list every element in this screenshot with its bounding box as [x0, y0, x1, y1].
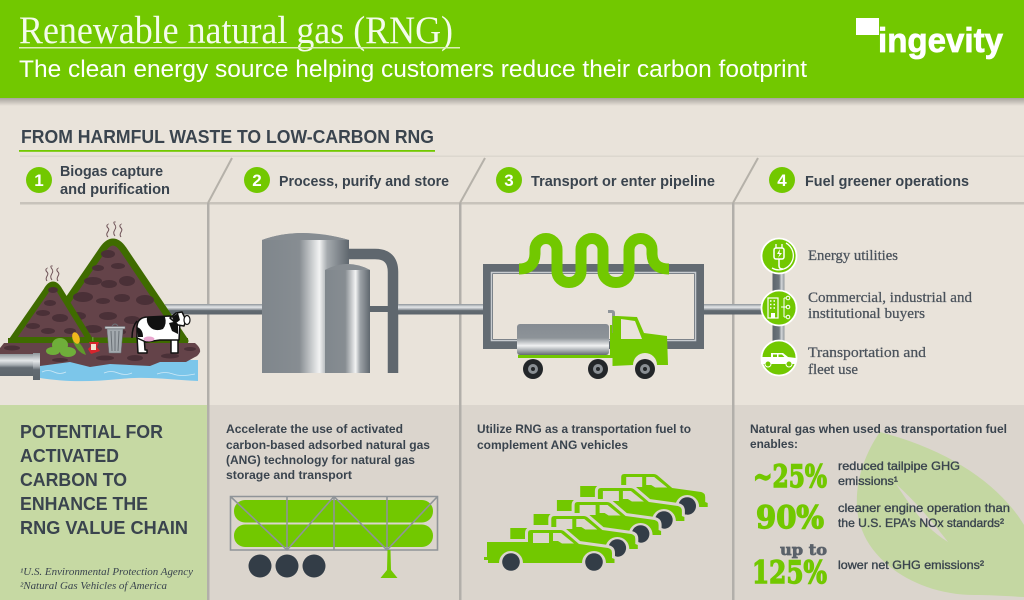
section heading: FROM HARMFUL WASTE TO LOW-CARBON RNG [21, 126, 434, 147]
inner highlight [492, 272, 696, 340]
footnotes [20, 567, 194, 592]
riser pipes between end-use icons [772, 270, 784, 346]
stat: 125 percent: 125% [752, 555, 827, 591]
illustration: pipeline loop [488, 238, 699, 344]
landing gear [380, 550, 398, 578]
step 3 heading: 3 [504, 171, 514, 190]
logo: ingevity: ingevity [878, 22, 1003, 60]
ground texture [4, 346, 196, 362]
upper cylinder [234, 500, 433, 522]
cab [612, 316, 668, 366]
bottom band [0, 405, 1024, 600]
wheel [635, 359, 655, 379]
text: ANG technology: Accelerate the use of activated [226, 422, 403, 436]
title underline [19, 47, 460, 48]
text: ANG technology [226, 422, 430, 482]
text: ANG technology: carbon-based adsorbed natural gas [226, 438, 430, 452]
exhaust [608, 310, 615, 333]
stat: 90 percent [756, 500, 1010, 536]
title: Renewable natural gas (RNG) [19, 9, 453, 52]
outer frame [488, 269, 699, 344]
water ripples [42, 370, 195, 376]
pipe: landfill to storage [165, 304, 263, 314]
small mound [12, 284, 90, 340]
text: transportation: fleet use [808, 362, 858, 378]
panel: potential green background [0, 405, 207, 600]
icon: trash can [105, 324, 125, 353]
stat: 25 percent: emissions¹ [838, 474, 898, 488]
steam: small mound [46, 266, 59, 281]
icon: commercial buildings [762, 290, 796, 326]
wheel [588, 359, 608, 379]
branch pipe [370, 306, 389, 312]
pipe: pipeline to end use [697, 304, 763, 314]
icon: energy utilities [762, 238, 796, 274]
chassis [518, 355, 613, 358]
text: transportation fuel: Utilize RNG as a transportation fuel to [477, 422, 691, 436]
udder [144, 336, 154, 342]
icon: corn [71, 331, 86, 355]
wheel [302, 554, 326, 578]
step 2 heading [244, 167, 449, 193]
illustration: storage tanks [262, 233, 393, 373]
wheel [276, 554, 298, 578]
spots [147, 317, 166, 330]
text: transportation [808, 345, 927, 378]
steam: big mound [107, 222, 122, 237]
text: natural gas enables: enables: [750, 437, 798, 451]
tank [517, 324, 609, 355]
step 1 heading: Biogas capture [60, 164, 163, 180]
big mound [40, 242, 185, 341]
rear leg [137, 336, 147, 353]
step 3 heading [496, 167, 715, 193]
wheel [523, 359, 543, 379]
step 4 heading [769, 167, 969, 193]
text: transportation: Transportation and [808, 345, 927, 361]
panel: potential heading: RNG VALUE CHAIN [20, 517, 188, 538]
stat: 90 percent: the U.S. EPA’s NOx standards² [838, 516, 1004, 530]
pipe flange [33, 353, 40, 380]
trailer frame [230, 496, 438, 550]
stat: 125 percent [752, 541, 984, 591]
footnotes: ¹U.S. Environmental Protection Agency [20, 567, 194, 578]
step 1 heading: 1 [34, 171, 44, 190]
text: natural gas enables: Natural gas when used as transportation fuel [750, 422, 1007, 436]
ear [184, 316, 190, 324]
outlet pipe [0, 354, 34, 376]
stat: 25 percent: reduced tailpipe GHG [838, 459, 960, 473]
step 4 heading: 4 [777, 171, 787, 190]
stat: 90 percent: cleaner engine operation than [838, 501, 1010, 515]
text: commercial buyers: institutional buyers [808, 306, 925, 322]
icon: fleet pickup [761, 340, 796, 376]
stat: 125 percent: up to [780, 541, 827, 559]
large tank [262, 233, 349, 373]
text: ANG technology: (ANG) technology for natural gas [226, 453, 415, 467]
stat: 25 percent: ~25% [753, 459, 827, 495]
stat: 90 percent: 90% [756, 500, 824, 536]
header band [0, 0, 1024, 106]
panel: potential heading [20, 421, 188, 538]
stat: 125 percent: lower net GHG emissions² [838, 558, 984, 572]
text: ANG technology: storage and transport [226, 468, 352, 482]
illustration: landfill [0, 222, 200, 381]
icon: leafy vegetables [46, 338, 76, 357]
small tank [325, 264, 370, 373]
illustration: gas storage trailer [230, 496, 438, 578]
body [137, 316, 180, 342]
text: transportation fuel [477, 422, 691, 452]
water [40, 360, 198, 381]
text: commercial buyers: Commercial, industrial and [808, 290, 973, 306]
column dividers and step row lines [20, 156, 1024, 600]
small tank dome [325, 264, 370, 270]
step 2 heading: 2 [252, 171, 262, 190]
front leg [171, 336, 178, 353]
leaf watermark [857, 432, 1024, 597]
text: commercial buyers [808, 290, 973, 322]
step 2 heading: Process, purify and store [279, 174, 449, 190]
green liner base [8, 338, 188, 343]
large tank dome [262, 233, 349, 240]
step 3 heading: Transport or enter pipeline [531, 174, 715, 190]
text: natural gas enables [750, 422, 1007, 451]
step 4 heading: Fuel greener operations [805, 174, 969, 190]
panel: potential heading: ACTIVATED [20, 445, 119, 466]
stat: 25 percent [753, 459, 960, 495]
text: energy utilities: Energy utilities [808, 248, 898, 264]
pipe: storage to pipeline [398, 304, 488, 314]
panel: potential heading: ENHANCE THE [20, 493, 148, 514]
panel: potential heading: CARBON TO [20, 469, 127, 490]
window [621, 319, 642, 339]
illustration: pickup fleet [484, 474, 708, 571]
text: transportation fuel: complement ANG vehicles [477, 438, 628, 452]
step 1 heading: and purification [60, 182, 170, 198]
footnotes: ²Natural Gas Vehicles of America [20, 581, 167, 592]
head [170, 312, 186, 326]
lower cylinder [234, 524, 433, 547]
illustration: tanker truck [517, 310, 668, 379]
wheel [248, 554, 272, 578]
subtitle: The clean energy source helping customers reduce their carbon footprint [19, 56, 807, 83]
ground [0, 343, 200, 367]
tail [132, 321, 137, 338]
panel: potential heading: POTENTIAL FOR [20, 421, 163, 442]
step 1 heading [26, 164, 170, 198]
icon: apple core [88, 337, 100, 354]
green pipeline serpentine [519, 238, 669, 282]
connecting pipe [349, 254, 393, 373]
icon: cow [132, 312, 190, 353]
